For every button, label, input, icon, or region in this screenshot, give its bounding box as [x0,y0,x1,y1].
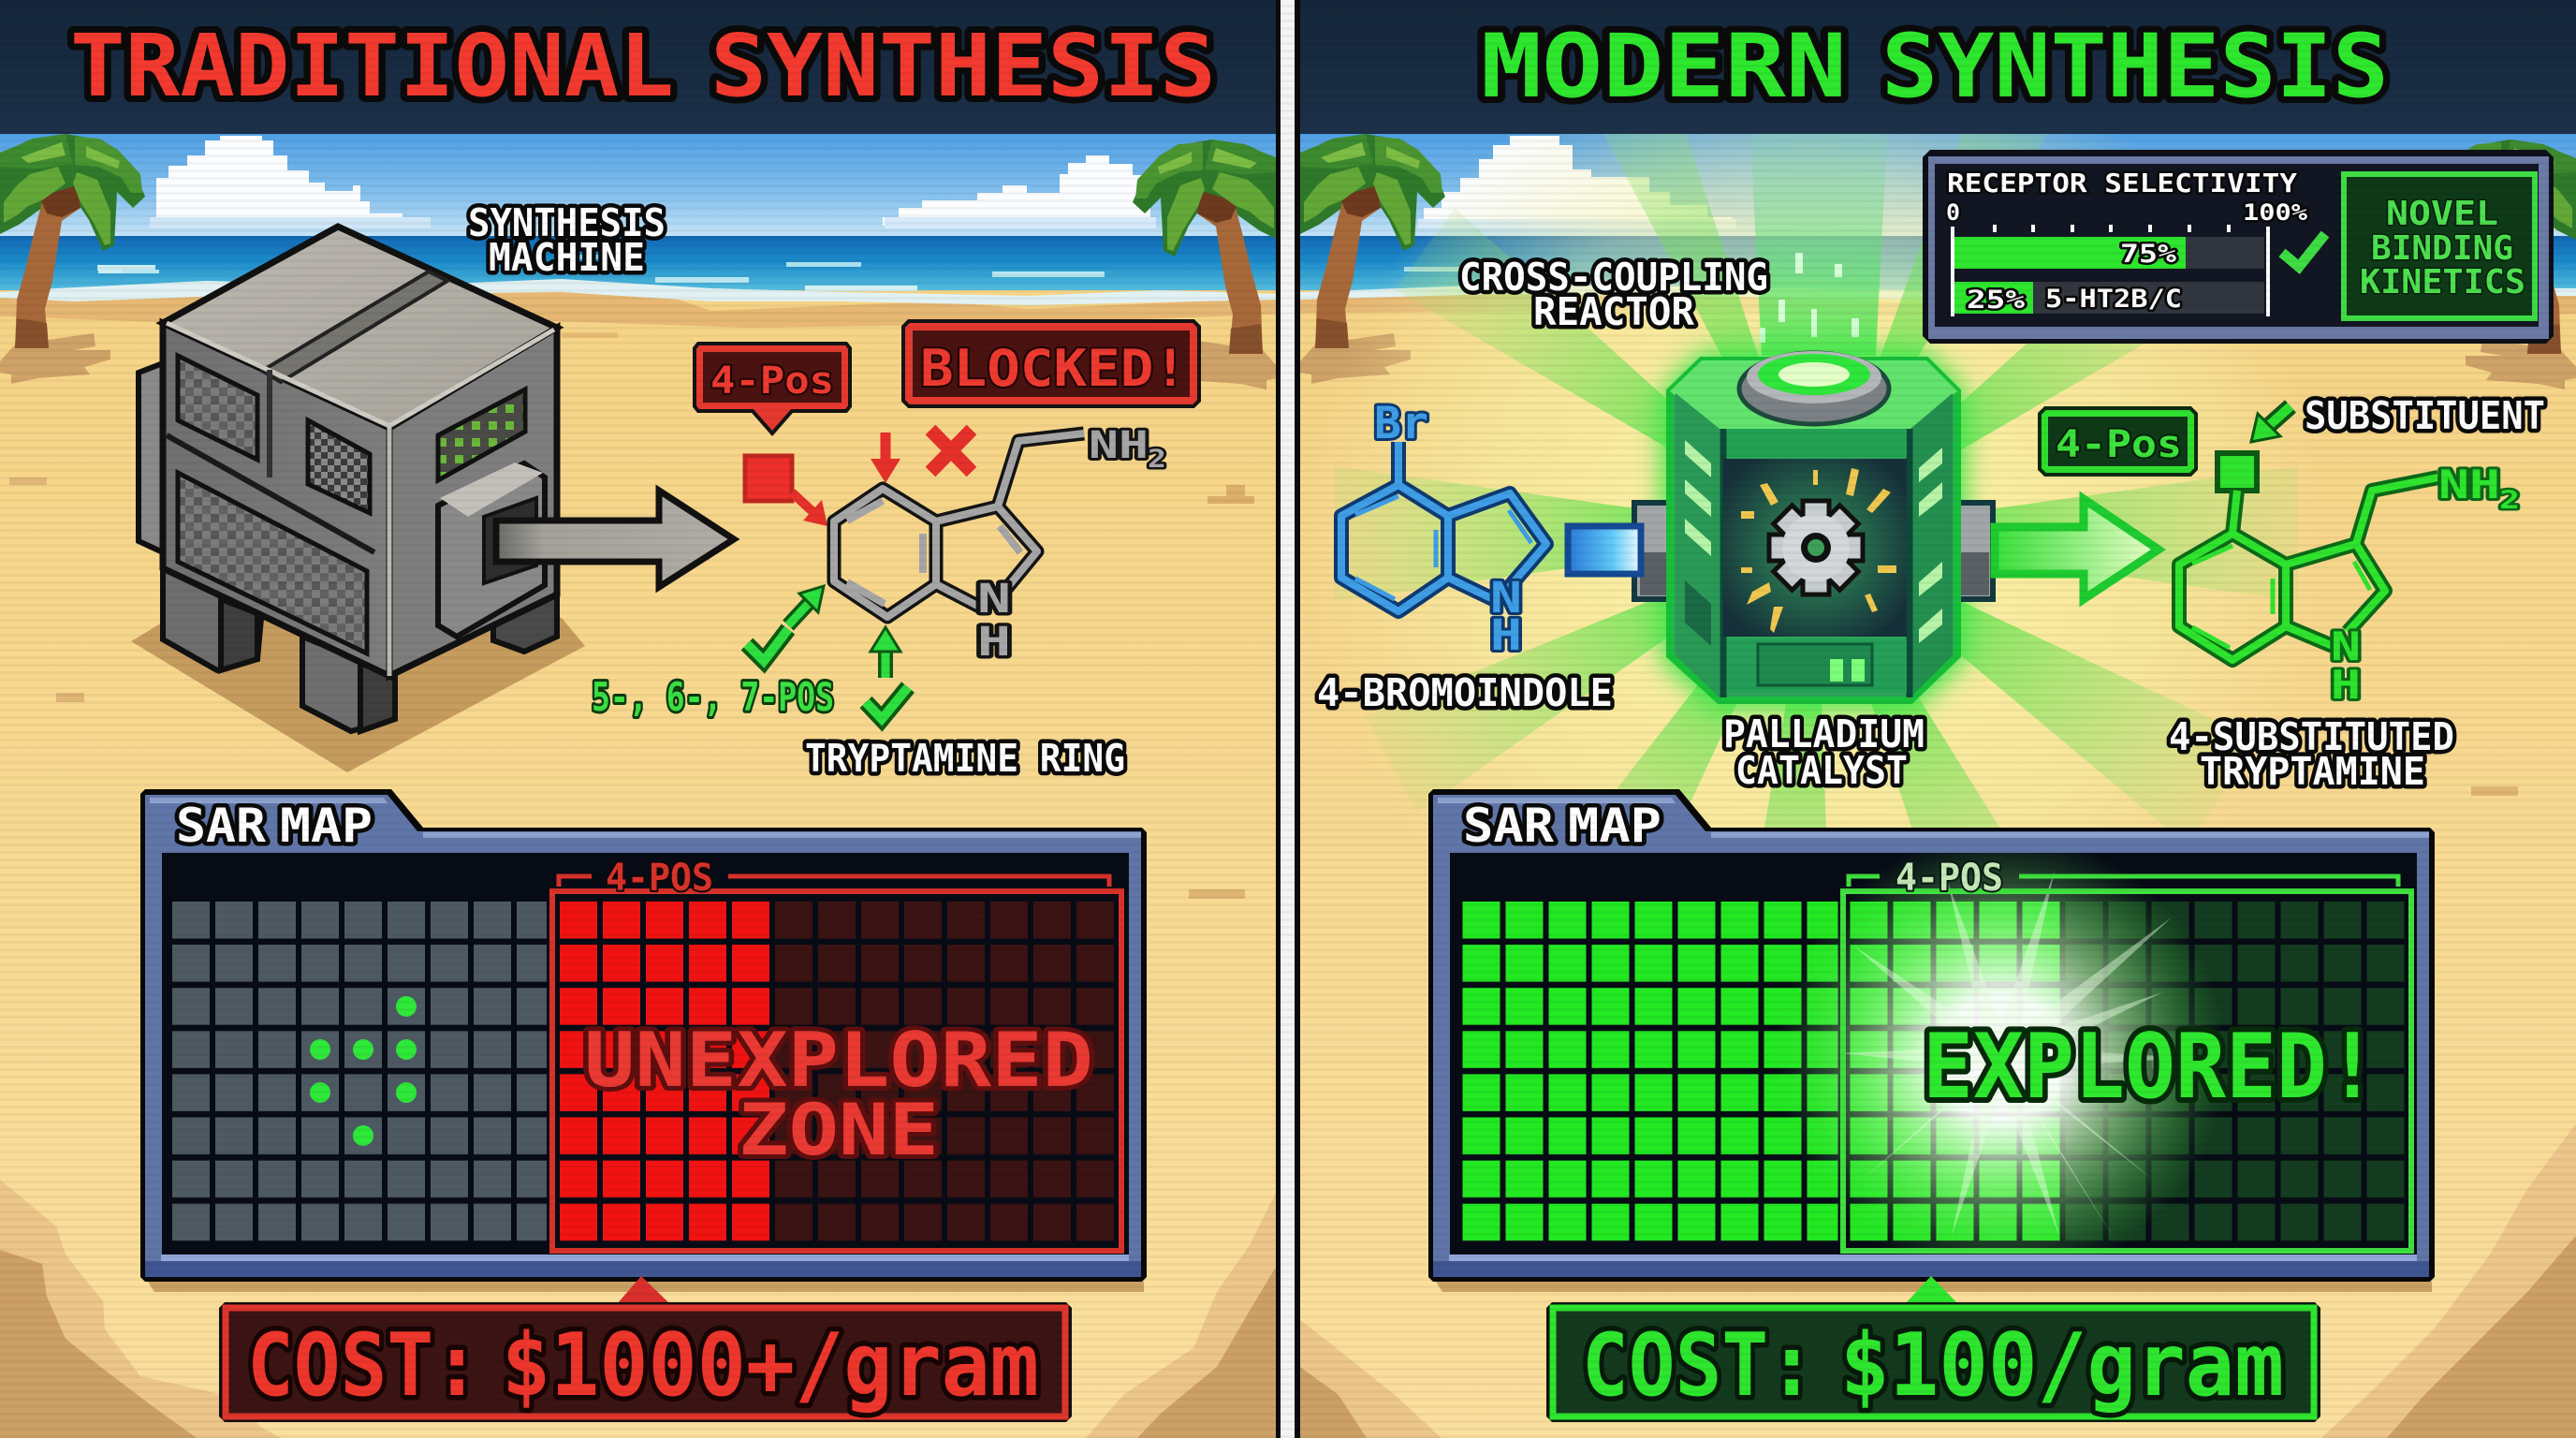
title: traditional synthesis: SYNTHESIS [710,16,1216,116]
palm tree: left panel, left [0,134,145,384]
label: substituent: SUBSTITUENT [2305,393,2545,438]
label: 4-substituted tryptamine [2169,714,2454,794]
machine side box [139,363,163,552]
atom labels: NH, NH2: 2 [1148,445,1166,474]
label: tryptamine ring: TRYPTAMINE RING [805,736,1125,781]
scale labels [1946,199,2308,226]
substituent square [2217,453,2257,491]
palm tree: left panel, right [1133,139,1278,389]
novel binding kinetics box: NOVEL [2386,195,2498,233]
heatmap: green cells [1462,902,1838,1241]
machine output port [438,463,545,637]
arrow: machine output [496,491,734,587]
machine legs [163,562,557,731]
arrow: to substituent [2251,406,2291,442]
reactor upper plate [1727,429,1907,457]
bar: 25% 5-HT2B/C: 25% [1967,286,2026,315]
arrow: red down [871,433,900,483]
callout: cost modern [1546,1276,2320,1422]
arrow: green diagonal [788,586,824,625]
atom labels: NH, NH2 green: NH [2438,462,2500,507]
label: 4-bromoindole: 4-BROMOINDOLE [1317,670,1613,715]
sand dunes: right panel, lower right [2321,1123,2576,1438]
panel: SAR map traditional [140,789,1147,1292]
explosion burst [1784,853,2217,1255]
clouds: right panel [1418,136,1736,228]
arrow: green up [871,627,900,678]
sand dunes: left panel, lower right [1086,1189,1278,1438]
header bar: modern [1300,0,2576,134]
SAR map title [176,799,373,853]
title: traditional synthesis [70,16,1216,116]
gear [1769,501,1863,594]
atom labels: Br, NH: Br [1374,398,1428,449]
reactor top beam [1750,134,1887,356]
4-bromoindole molecule [1341,442,1546,611]
callout: 4-Pos green: 4-Pos [2056,423,2182,466]
atom labels: NH, NH2 [977,424,1166,666]
4-pos bracket: 4-POS [606,857,713,900]
reactor glow and rays [1310,28,2321,1039]
label: 4-substituted tryptamine: 4-SUBSTITUTED [2169,714,2454,759]
heatmap: red 4-pos cells [560,902,771,1241]
reactor body [1670,360,1957,700]
callout: 4-Pos green [2040,408,2196,475]
atom labels: NH, NH2 green: 2 [2499,486,2520,515]
synthesis machine [131,227,585,772]
blocked 4-position square [745,456,792,501]
machine right face [389,328,557,676]
label: cross-coupling reactor: CROSS-COUPLING [1459,255,1768,300]
bar: 25% 5-HT2B/C [1954,282,2264,315]
atom labels: NH, NH2 green: N [2331,624,2361,669]
sand dunes: right panel, lower left [1300,1320,1442,1438]
SAR map title: SAR [1463,799,1555,853]
palm tree: right panel, left [1300,134,1445,384]
reactor inlet housing [1634,503,1674,599]
title: modern synthesis: MODERN [1481,16,1847,118]
clouds: left panel [150,136,1156,228]
label: synthesis machine: MACHINE [489,235,645,280]
machine grilles [178,356,257,460]
label: synthesis machine: SYNTHESIS [468,200,666,245]
atom labels: Br, NH: H [1490,610,1522,660]
heatmap: explored gray cells [172,902,547,1241]
machine left face [163,323,389,676]
selectivity title: RECEPTOR SELECTIVITY [1947,168,2297,198]
check mark: green 2 [866,687,908,719]
label: synthesis machine [468,200,666,280]
arrow: blue inlet [1568,526,1641,574]
title: modern synthesis [1481,16,2389,118]
label: cross-coupling reactor: REACTOR [1533,289,1694,334]
atom labels: NH, NH2: N [977,576,1011,623]
check mark [2282,234,2325,267]
callout: 4-Pos red [695,344,850,433]
callout: blocked: BLOCKED! [920,339,1187,398]
arrow: green outlet [1995,499,2159,599]
callout: 4-Pos red: 4-Pos [710,360,834,403]
title: modern synthesis: SYNTHESIS [1881,16,2389,118]
reactor [1634,351,1993,710]
machine top face [163,227,557,428]
heatmap: green 4-pos cells [1850,902,2061,1241]
unexplored zone label: UNEXPLORED [584,1017,1093,1104]
sparks [1741,468,1896,633]
panel: receptor selectivity [1923,150,2554,344]
callout: cost modern: COST: [1582,1314,1815,1416]
novel binding kinetics box: KINETICS [2360,263,2525,301]
atom labels: NH, NH2 green [2331,462,2520,708]
label: cross-coupling reactor [1459,255,1768,334]
sand dunes: left panel, lower left [0,1180,281,1438]
SAR map title [1463,799,1661,853]
callout: cost modern: $100/gram [1840,1314,2284,1416]
machine green display [438,389,525,480]
label: palladium catalyst: PALLADIUM [1723,712,1925,756]
machine ground shadow [131,524,585,772]
reactor soft outer glow [1661,351,1966,710]
callout: cost traditional: $1000+/gram [502,1314,1039,1416]
reactor cap [1739,351,1889,424]
atom labels: NH, NH2: H [977,619,1011,666]
reactor outlet housing [1954,503,1993,599]
explored label: EXPLORED! [1923,1016,2378,1119]
header bar: traditional [0,0,1276,134]
novel binding kinetics box [2344,174,2535,318]
reactor window [1723,459,1907,637]
4-pos bracket [552,857,1121,1251]
label: palladium catalyst: CATALYST [1735,748,1908,793]
arrow: red diagonal into 4-position [792,492,827,526]
heatmap: dark red cells [775,902,1114,1241]
label: 4-substituted tryptamine: TRYPTAMINE [2200,749,2425,794]
atom labels: NH, NH2: NH [1089,424,1149,467]
scale ticks [1951,225,2270,316]
reactor vents [1685,440,1942,643]
callout: blocked [903,321,1199,406]
blocked X mark [930,430,972,472]
callout: cost traditional [219,1276,1072,1422]
label: palladium catalyst [1723,712,1925,793]
bar: 75% [1954,237,2264,269]
bar: 75%: 75% [2120,240,2177,269]
scale labels: 0 [1946,199,1960,226]
heatmap: dark green cells [2065,902,2404,1241]
title: traditional synthesis: TRADITIONAL [70,16,674,116]
SAR map title: MAP [280,799,373,853]
novel binding kinetics box: BINDING [2371,229,2513,268]
4-pos bracket [1843,857,2411,1251]
panel: SAR map modern [1428,789,2435,1292]
unexplored zone label: ZONE [739,1088,939,1171]
label: 5-, 6-, 7-POS: 5-, 6-, 7-POS [592,674,834,720]
centre divider [1276,0,1300,1438]
check mark: green 1 [747,629,788,661]
unexplored zone label [584,1017,1093,1171]
atom labels: NH, NH2 green: H [2331,662,2361,708]
4-substituted tryptamine molecule [2179,477,2438,660]
heatmap: hit dots [310,996,417,1146]
scale labels: 100% [2243,199,2308,226]
SAR map title: MAP [1568,799,1661,853]
atom labels: Br, NH [1374,398,1522,660]
4-pos bracket: 4-POS [1895,857,2003,900]
palm tree: right panel, right [2431,139,2576,389]
tryptamine molecule [834,433,1084,617]
atom labels: Br, NH: N [1490,573,1522,623]
reactor lower plate [1727,638,1907,693]
SAR map title: SAR [176,799,267,853]
bar: 25% 5-HT2B/C: 5-HT2B/C [2045,285,2182,314]
callout: cost traditional: COST: [247,1314,480,1416]
